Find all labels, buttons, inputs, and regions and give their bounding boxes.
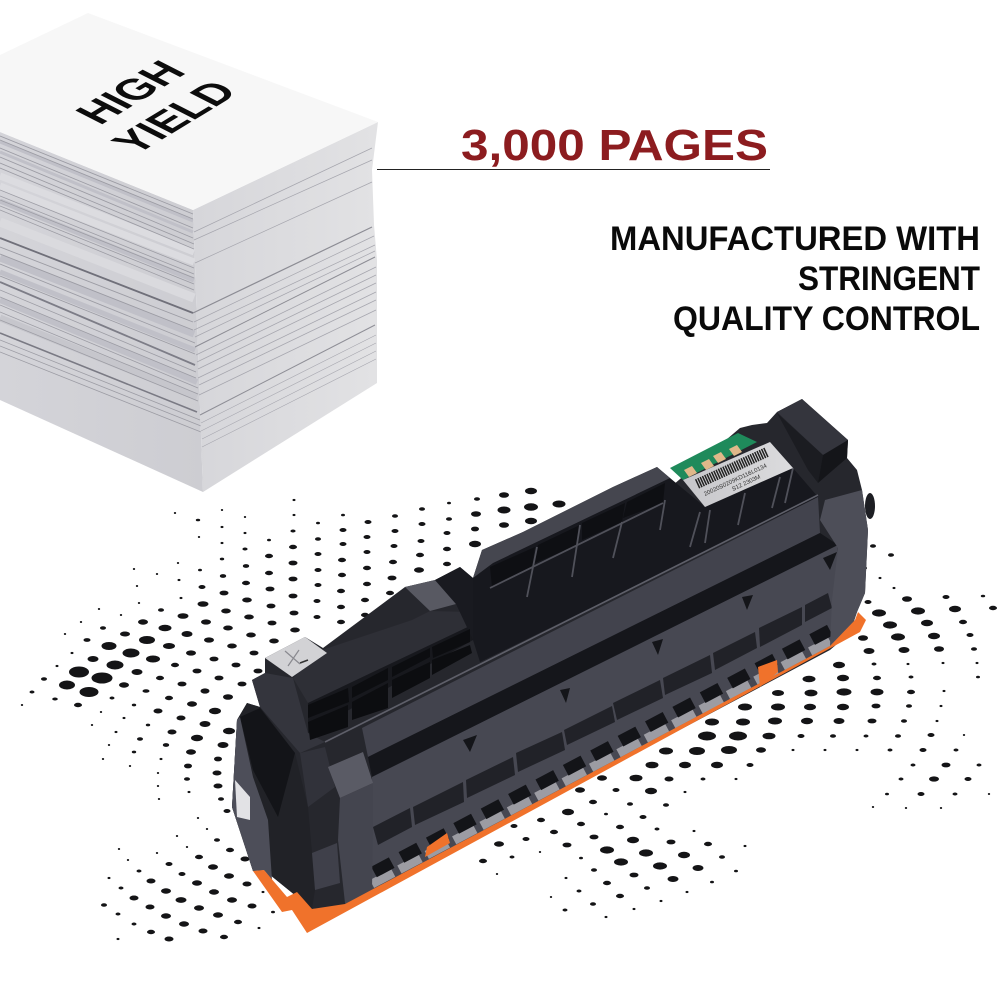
frame line [325,495,818,742]
halftone dot field [21,488,997,942]
raised block ribs [490,468,793,597]
long upper rail [362,497,820,757]
left end cap [232,703,340,909]
stack label: HIGH: HIGH [66,55,197,130]
left block top cap [405,580,456,611]
paper stack top sheet [0,13,378,210]
raised block top face [473,467,670,578]
barcode label: S12 2303M [731,474,762,493]
text block: quality control: STRINGENT [798,260,980,298]
area under the raised fin block [473,468,818,662]
cartridge chip [670,433,757,480]
text block: quality control [610,220,980,338]
toner cartridge [232,399,875,933]
paper stack right face [193,122,378,492]
barcode label: 20020S0209KD116L0134 [703,463,769,498]
paper stack left face [0,132,203,492]
barcode label [683,442,793,507]
end cap sticker [235,780,250,820]
text block: quality control: QUALITY CONTROL [673,300,980,338]
stack label: YIELD: YIELD [102,75,249,160]
right end handle [777,399,848,483]
long dark groove [368,533,838,777]
row of recesses [373,593,832,845]
left block fin cells [308,629,472,740]
side knob [865,493,875,519]
connector line under the page count [377,168,770,170]
wedge between the blocks [435,567,473,640]
long lower rail and tooth band [345,545,838,904]
text block: quality control: MANUFACTURED WITH [610,220,980,258]
bottom teeth [372,629,832,884]
cartridge body silhouette [232,399,868,909]
left support pillar [328,752,373,903]
raised block fin cells [490,483,665,587]
right end column [820,490,875,646]
left upper block [252,567,473,753]
recycling label [265,637,327,677]
orange base strip [253,612,866,933]
paper stack [0,13,378,492]
rail notches [463,552,837,752]
heading: page yield: 3,000 PAGES [461,121,768,170]
